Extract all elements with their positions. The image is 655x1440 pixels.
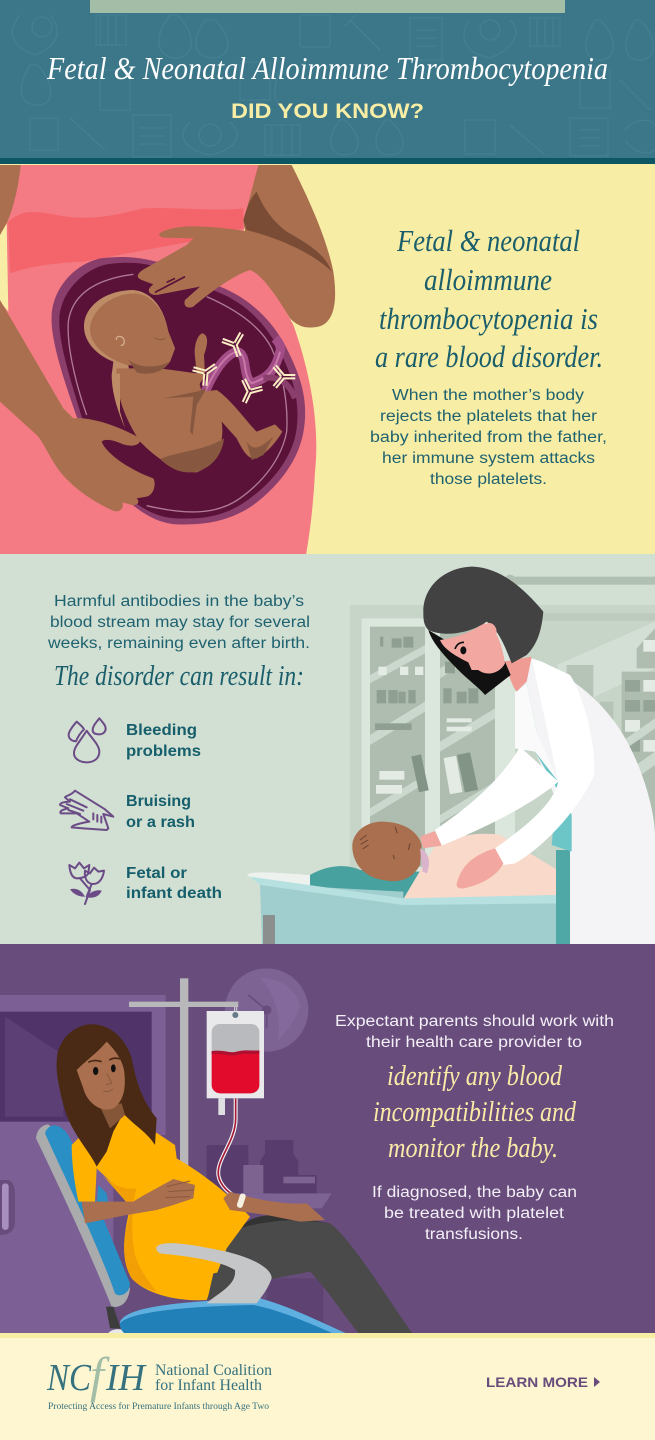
text block: expectant parents: Expectant parents should work with xyxy=(335,1013,614,1030)
icon: flowers xyxy=(69,863,104,904)
armrest xyxy=(156,1243,272,1303)
IV pole xyxy=(180,978,188,1165)
heading: rare blood disorder: a rare blood disorder. xyxy=(375,339,603,374)
text block: mother's immune system: baby inherited from the father, xyxy=(370,429,607,446)
list: possible outcomes: Fetal or xyxy=(126,865,187,882)
antibodies xyxy=(191,356,222,387)
text block: mother's immune system: her immune system attacks xyxy=(382,450,595,467)
logo: NCfIH: National Coalition xyxy=(155,1362,272,1379)
baby xyxy=(352,822,422,881)
hair and face xyxy=(57,1024,157,1167)
callout: identify and monitor: monitor the baby. xyxy=(388,1132,558,1164)
header banner xyxy=(0,0,655,164)
scrubs and coat xyxy=(556,850,573,945)
subtitle: did you know: DID YOU KNOW? xyxy=(231,100,424,123)
heading: rare blood disorder xyxy=(375,223,603,374)
list: possible outcomes: Bleeding xyxy=(126,722,197,739)
hands xyxy=(457,848,503,888)
text block: platelet transfusions: If diagnosed, the baby can xyxy=(372,1184,577,1201)
panel: disorder outcomes xyxy=(0,554,655,945)
text block: mother's immune system: rejects the platelets that her xyxy=(380,408,597,425)
text block: expectant parents xyxy=(335,1013,614,1051)
list: possible outcomes xyxy=(126,722,222,902)
heading: rare blood disorder: Fetal & neonatal xyxy=(396,223,580,258)
panel: monitoring and treatment xyxy=(0,944,655,1335)
umbilical cord xyxy=(203,338,280,398)
list: possible outcomes: problems xyxy=(126,743,201,760)
text block: harmful antibodies xyxy=(47,593,310,652)
arms xyxy=(82,1179,195,1223)
footer band xyxy=(0,1333,655,1440)
icon: blood drops xyxy=(59,717,114,905)
wall clock xyxy=(225,968,308,1052)
illustration: mother receiving transfusion xyxy=(0,968,412,1333)
chair xyxy=(36,1124,130,1307)
callout: identify and monitor: incompatibilities and xyxy=(373,1096,576,1128)
logo: NCfIH: f xyxy=(90,1347,110,1403)
logo: NCfIH: for Infant Health xyxy=(155,1377,262,1394)
pants xyxy=(207,1215,413,1335)
nurse head xyxy=(503,657,532,692)
text block: expectant parents: their health care provider to xyxy=(366,1034,582,1051)
heading: the disorder can result in: The disorder can result in: xyxy=(54,661,304,692)
text block: platelet transfusions: transfusions. xyxy=(425,1226,523,1243)
shelf with bottles xyxy=(220,1193,332,1208)
callout: identify and monitor: identify any blood xyxy=(387,1060,562,1092)
text block: platelet transfusions: be treated with platelet xyxy=(384,1205,565,1222)
illustration: nurse with newborn xyxy=(247,566,655,944)
logo: NCfIH xyxy=(46,1347,272,1411)
text block: platelet transfusions xyxy=(372,1184,577,1243)
left arm and hand xyxy=(0,300,155,511)
woman torso xyxy=(72,1113,250,1300)
logo: NCfIH: Protecting Access for Premature Infants through Age Two xyxy=(48,1401,270,1411)
logo: NCfIH: NC xyxy=(46,1357,92,1399)
icon: hand with rash xyxy=(60,791,113,830)
fetus xyxy=(84,290,175,375)
tub and blanket xyxy=(247,872,420,898)
heading: rare blood disorder: alloimmune xyxy=(424,262,552,297)
text block: mother's immune system xyxy=(370,387,607,488)
callout: identify and monitor xyxy=(373,1060,576,1164)
heading: rare blood disorder: thrombocytopenia is xyxy=(379,301,598,336)
text block: mother's immune system: those platelets. xyxy=(430,471,547,488)
illustration: fetus in womb with hands xyxy=(0,165,336,554)
text block: harmful antibodies: blood stream may stay for several xyxy=(50,614,310,631)
logo: NCfIH: IH xyxy=(105,1357,147,1399)
right arm and hand xyxy=(138,165,335,328)
blood bag xyxy=(207,1011,264,1098)
text block: mother's immune system: When the mother’s body xyxy=(392,387,584,404)
list: possible outcomes: Bruising xyxy=(126,793,191,810)
text block: harmful antibodies: Harmful antibodies in the baby’s xyxy=(54,593,304,610)
link: learn more: LEARN MORE xyxy=(486,1374,588,1390)
panel: pregnancy and antibodies xyxy=(0,164,655,555)
text block: harmful antibodies: weeks, remaining even after birth. xyxy=(47,635,310,652)
list: possible outcomes: or a rash xyxy=(126,814,195,831)
list: possible outcomes: infant death xyxy=(126,885,222,902)
